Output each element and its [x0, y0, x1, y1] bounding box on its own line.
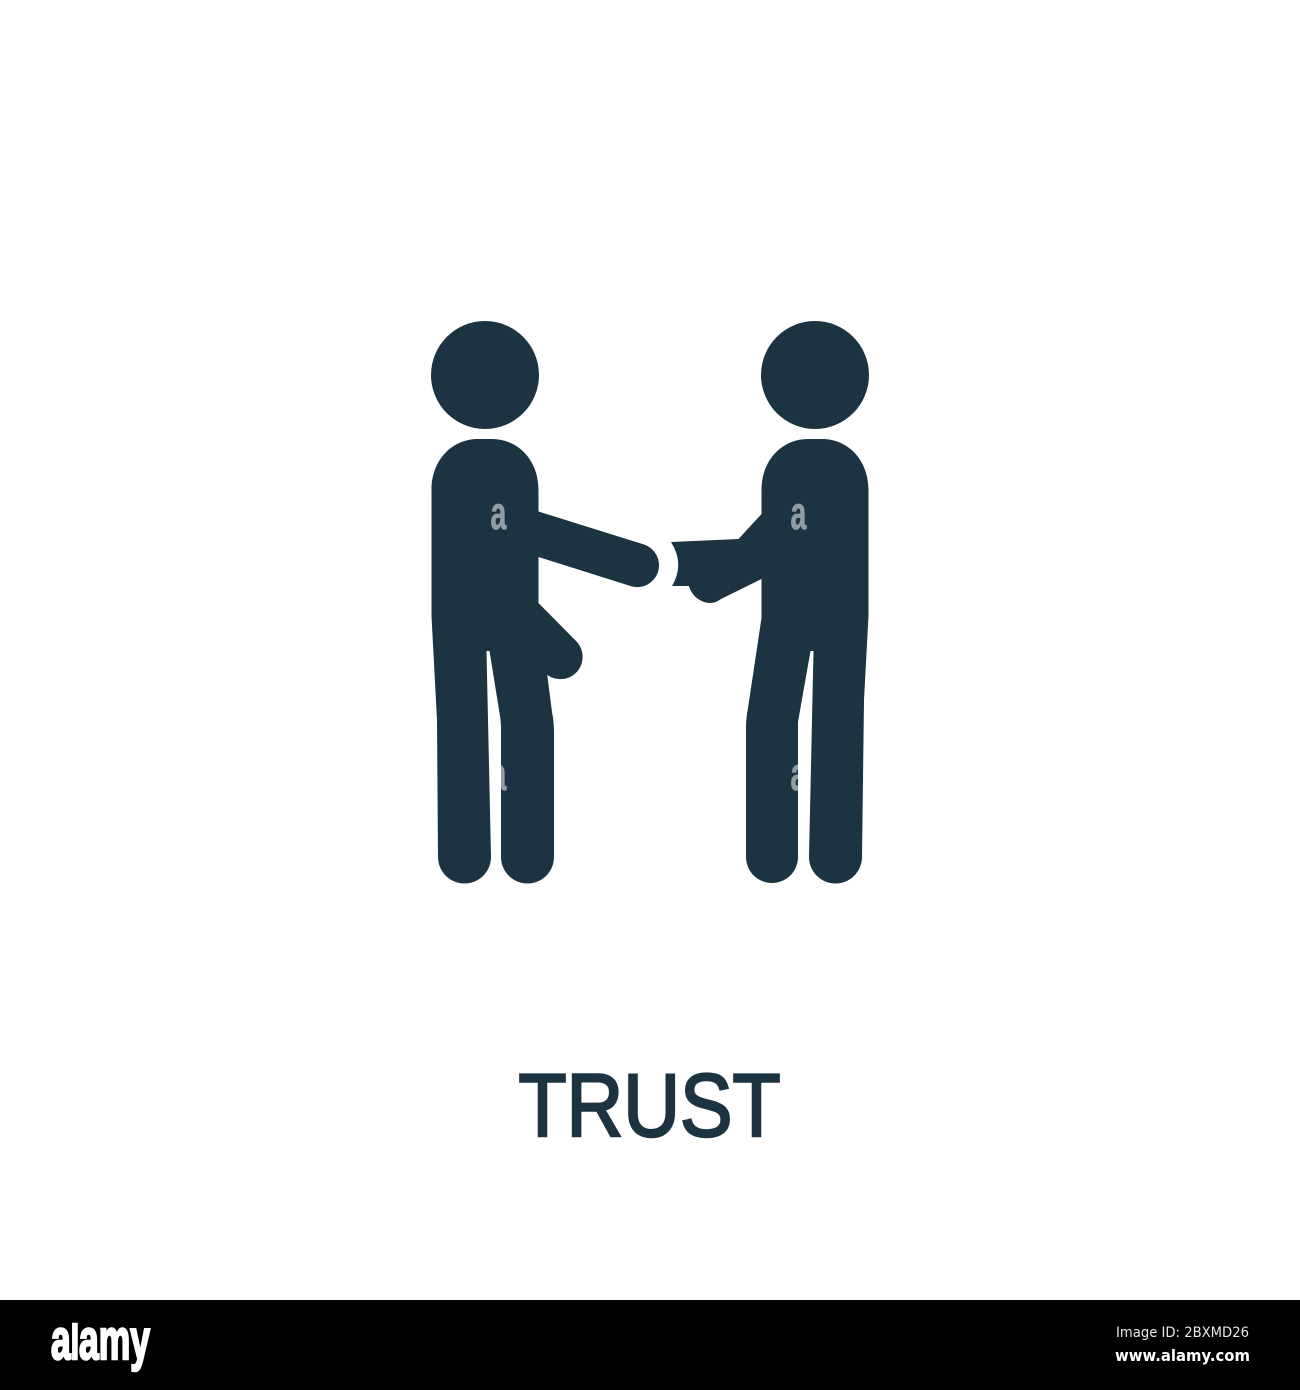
watermark letters over figures: a — [790, 488, 807, 540]
footer bar — [0, 1300, 1300, 1390]
icon: left person — [431, 321, 659, 884]
watermark letters over figures: a — [490, 488, 507, 540]
icon: right person — [671, 321, 869, 883]
footer logo: alamy: alamy — [51, 1308, 150, 1372]
footer image id: Image ID: 2BXMD26 — [1116, 1325, 1249, 1341]
footer website: www.alamy.com — [1115, 1346, 1250, 1365]
title: TRUST: TRUST — [518, 1055, 780, 1155]
watermark letters over figures — [490, 488, 807, 801]
watermark letters over figures: a — [790, 749, 807, 801]
watermark letters over figures: a — [490, 749, 507, 801]
icon: two people shaking hands — [431, 321, 869, 884]
